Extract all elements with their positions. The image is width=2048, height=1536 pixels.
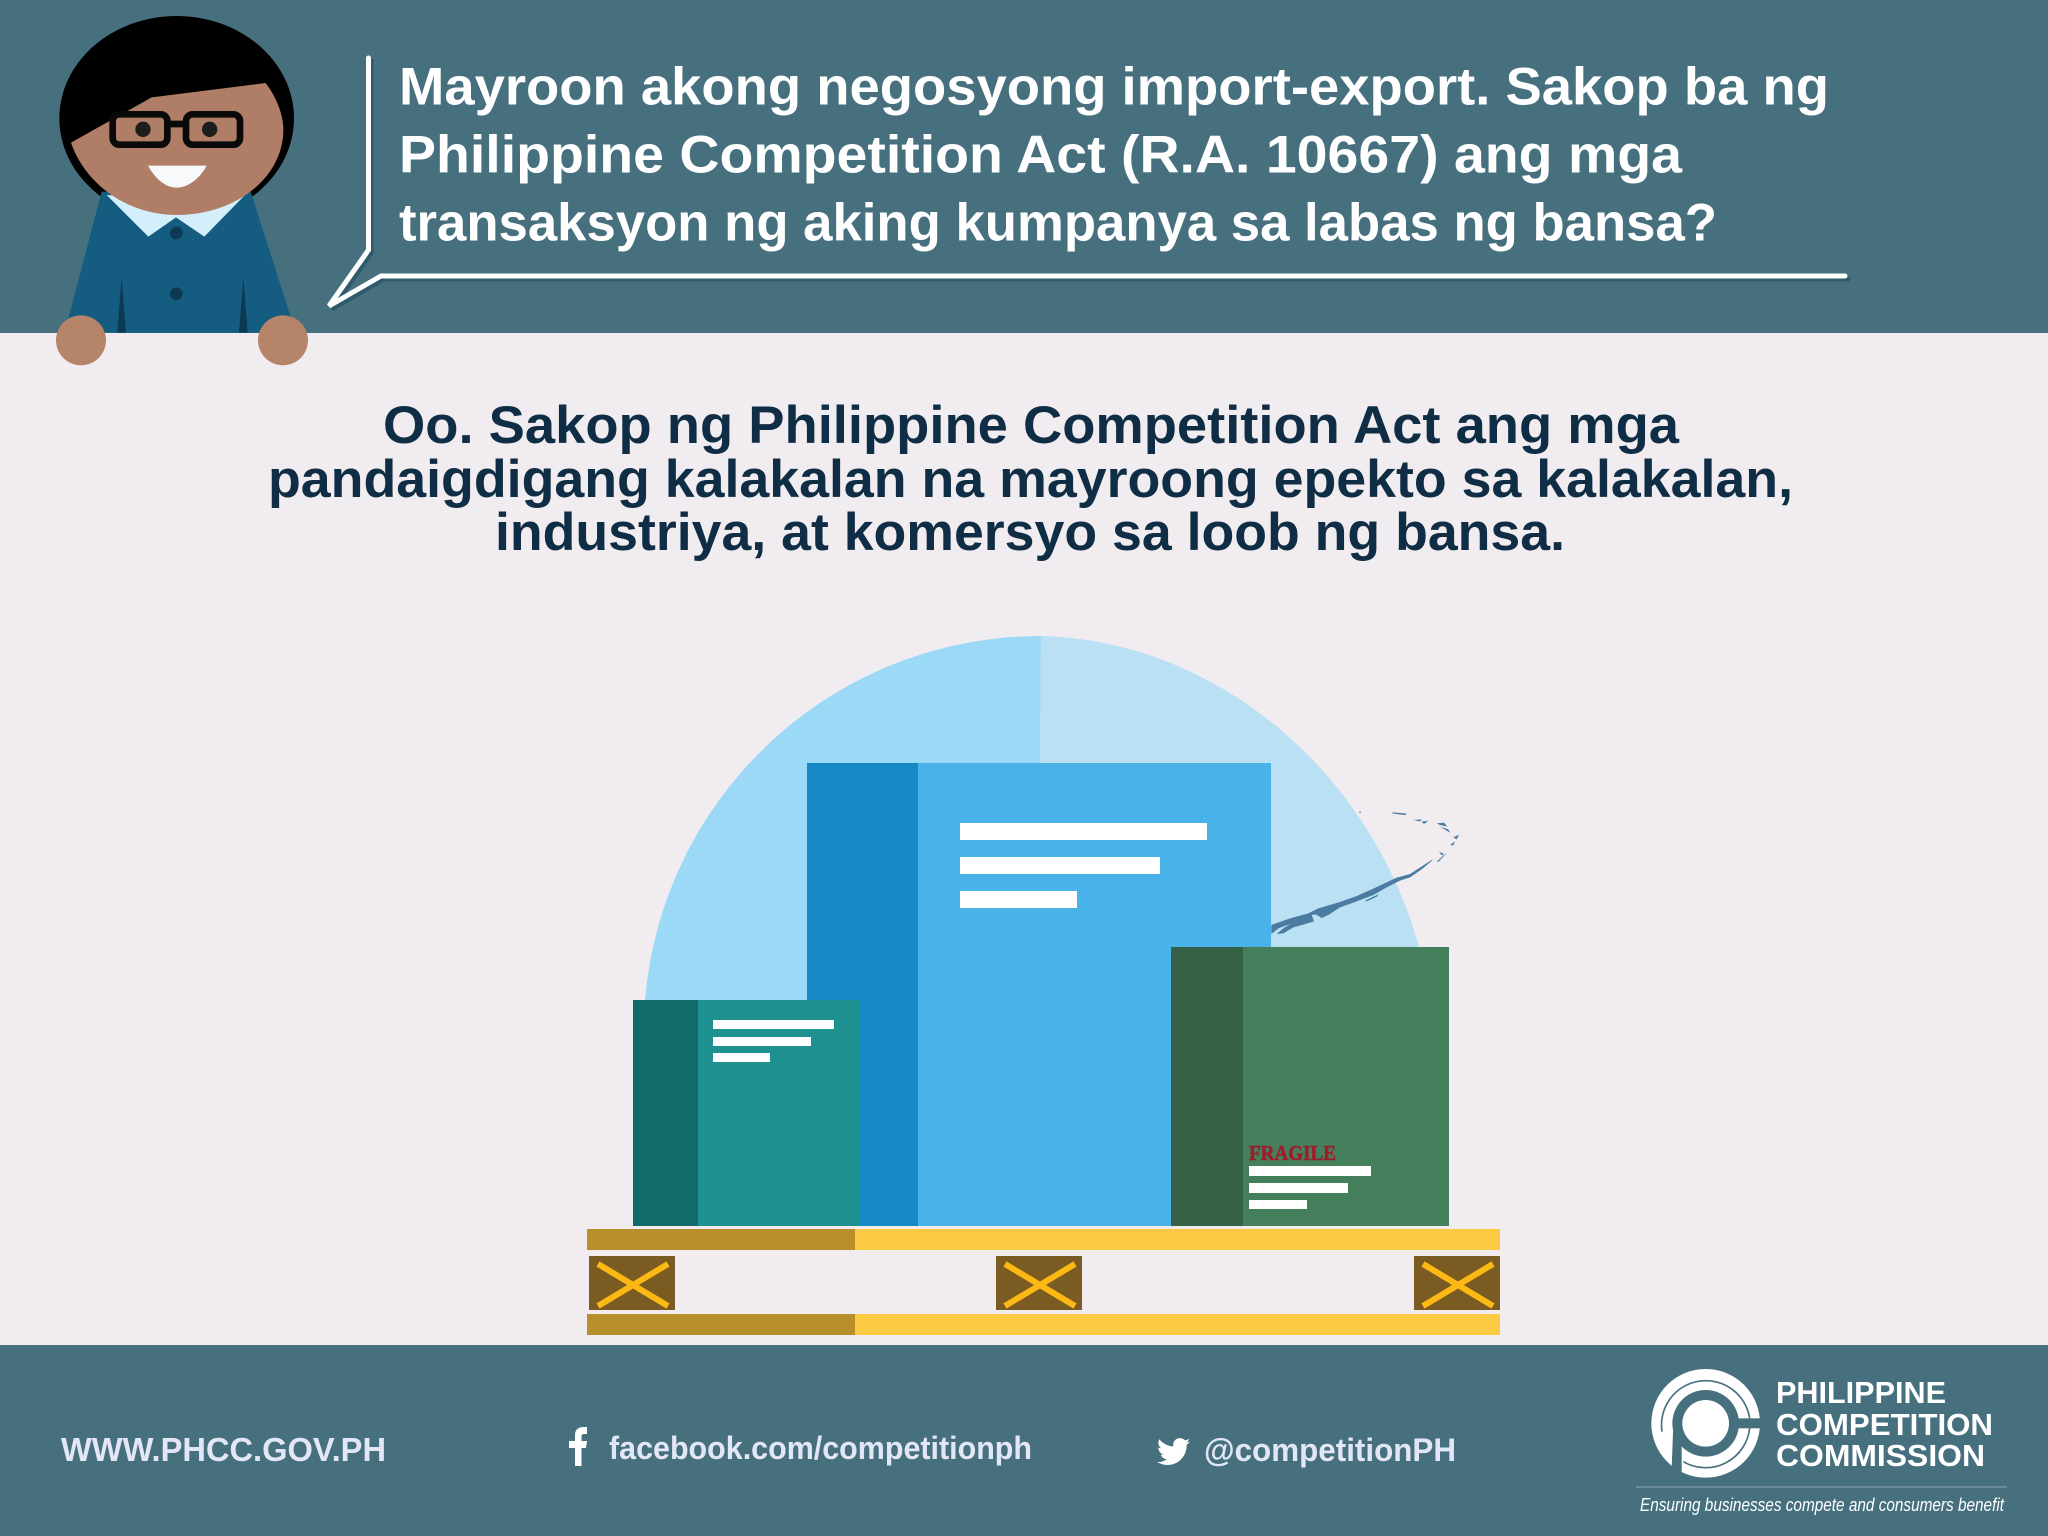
pallet <box>587 1229 1500 1335</box>
glasses <box>113 114 240 145</box>
illustration: cargo on pallet with globe <box>587 636 1500 1335</box>
teal box <box>633 1000 859 1226</box>
hair <box>59 16 294 221</box>
collar <box>107 195 245 237</box>
hands <box>56 315 308 365</box>
logo wordmark <box>1776 1375 1993 1473</box>
speech bubble outline <box>329 58 1848 309</box>
globe right half <box>1038 636 1419 1030</box>
green fragile box <box>1171 947 1449 1226</box>
logo wordmark: COMMISSION <box>1776 1438 1985 1473</box>
globe left half <box>645 636 1041 1030</box>
answer text: industriya, at komersyo sa loob ng bansa. <box>495 503 1565 562</box>
question heading: Mayroon akong negosyong import-export. Sakop ba ng <box>399 58 1829 116</box>
shirt <box>67 192 293 333</box>
question heading: Philippine Competition Act (R.A. 10667) ang mga <box>399 126 1683 184</box>
website link: WWW.PHCC.GOV.PH <box>61 1431 386 1468</box>
shirt pleats <box>117 277 248 333</box>
facebook handle: facebook.com/competitionph <box>609 1430 1032 1466</box>
header band <box>0 0 2048 333</box>
answer text <box>268 396 1793 562</box>
eyes <box>135 122 217 137</box>
question heading: transaksyon ng aking kumpanya sa labas ng bansa? <box>399 194 1717 252</box>
face <box>71 83 283 215</box>
footer band <box>0 1345 2048 1536</box>
twitter handle: @competitionPH <box>1204 1432 1456 1468</box>
ink swoosh <box>1271 811 1459 934</box>
answer text: pandaigdigang kalakalan na mayroong epekto sa kalakalan, <box>268 450 1793 509</box>
green fragile box: FRAGILE <box>1249 1141 1336 1165</box>
question heading <box>399 58 1829 252</box>
logo emblem <box>1651 1369 1763 1480</box>
shirt buttons <box>170 227 183 300</box>
icon: facebook <box>569 1427 587 1466</box>
logo wordmark: COMPETITION <box>1776 1407 1993 1442</box>
answer text: Oo. Sakop ng Philippine Competition Act ang mga <box>383 396 1680 455</box>
large blue box <box>807 763 1271 1226</box>
logo wordmark: PHILIPPINE <box>1776 1375 1946 1410</box>
smile <box>148 166 207 188</box>
icon: twitter <box>1157 1438 1190 1465</box>
character: man with glasses <box>56 16 308 365</box>
